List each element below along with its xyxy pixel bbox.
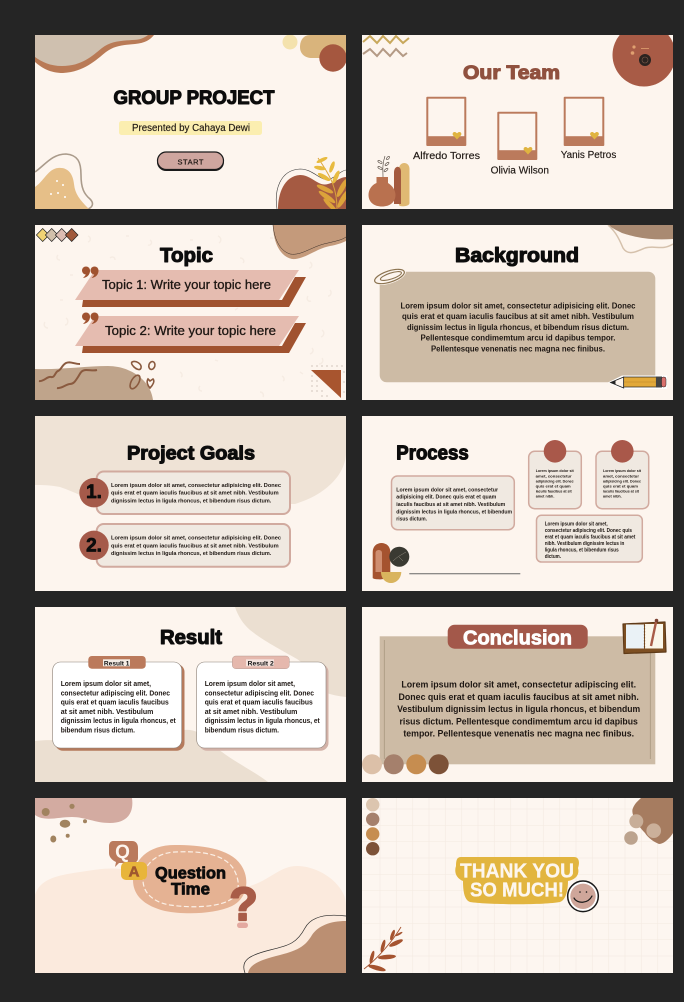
title: Project Goals: Project Goals [127,443,255,465]
name: Yanis Petros: Yanis Petros [561,150,616,161]
panel: Conclusion [362,607,673,782]
photo frame 2 [497,112,537,160]
text box: top right: amet, consectetur [603,473,639,478]
blob: top right [273,225,346,259]
photo frame 3 [564,97,604,146]
card: Result 2: bibendum risus dictum. [205,725,279,734]
goal 1 [79,472,290,514]
name: Olivia Wilson: Olivia Wilson [491,166,549,177]
heading pill: Conclusion: Conclusion [463,627,572,649]
text box: left: risus dictum. [396,517,427,523]
text box: left: Lorem ipsum dolor sit amet, consectetur [396,487,499,493]
text box: top middle: quis erat et quam [536,484,571,489]
goal 1: 1. [86,482,102,503]
card: Result 1: at sit amet nibh. Vestibulum [61,707,153,716]
title: Result: Result [160,627,222,649]
text box: bottom: consectetur adipiscing elit. Donec quis [545,528,632,534]
card: Result 1 [53,656,185,751]
card: Result 2: Result 2 [248,661,274,667]
text box: top right: iaculis faucibus at sit [603,489,640,494]
blob: lower background [35,866,346,973]
title: GROUP PROJECT: GROUP PROJECT [114,87,275,109]
triangle with dots [311,366,344,398]
card: Result 1: Result 1 [104,661,130,667]
text box: top right: quis erat et quam [603,484,638,489]
text card [380,636,655,764]
blob: bottom left with squiggles [35,361,156,400]
text box: top right: amet nibh. [603,494,622,499]
text card: dignissim lectus in ligula rhoncus, et bibendum risus dictum. [407,323,629,332]
icon: camera circle [612,35,673,86]
title: Topic: Topic [160,244,213,267]
icon: paperclip [374,268,406,285]
panel: Thank you [362,798,673,973]
text card: Pellentesque venenatis nec magna nec finibus. [431,345,605,354]
heading pill: Conclusion [448,625,588,649]
illustration: arches and plant circle [373,543,409,583]
sticker: thank you so much: THANK YOU [460,860,574,882]
zigzag decoration [363,36,409,56]
blob: top left [35,35,154,73]
text box: top middle: amet, consectetur [536,473,572,478]
text card: risus dictum. Pellentesque condimemtum arcu id dapibus [400,716,638,726]
goal 2 [79,524,290,567]
decor: diamonds [36,228,78,242]
photo frame 1 [426,97,466,146]
text box: top right [596,440,649,509]
sticker: thank you so much [455,857,579,904]
blob: top right [235,607,346,697]
card: Result 1: bibendum risus dictum. [61,725,135,734]
card: Result 1: quis erat et quam iaculis faucibus [61,698,169,707]
text box: top right: adipisicing elit. Donec [603,478,642,483]
panel: Background [362,225,673,400]
blob: question time badge [133,845,246,913]
icon: smiley [568,881,598,912]
blob: bottom left [35,154,92,209]
text card: Lorem ipsum dolor sit amet, consectetur adipisicing elit. Donec [400,301,636,310]
text card [380,272,655,382]
sticker: thank you so much: SO MUCH! [470,879,564,901]
button: START: START [178,158,204,166]
text box: bottom: erat et quam iaculis faucibus at sit amet [545,535,636,541]
blob: top right with circles [624,798,673,845]
text box: bottom [536,515,642,562]
blob: top background [35,416,346,504]
text box: top middle: adipisicing elit. Donec [536,478,574,483]
icon: A bubble: A [129,864,140,880]
icon: A bubble [121,862,147,880]
heading: Question Time [155,863,226,898]
swatches [362,754,449,774]
card: Result 1: dignissim lectus in ligula rhoncus, et [61,716,176,725]
icon: question mark: ? [229,878,258,930]
text card: Pellentesque condimemtum arcu id dapibus tempor. [420,334,616,343]
text box: bottom: Lorem ipsum dolor sit amet, [545,522,608,528]
text box: bottom: dictum. [545,554,561,560]
card: Result 1: consectetur adipiscing elit. Donec [61,688,170,697]
text box: top middle: iaculis faucibus at sit [536,489,572,494]
text card: tempor. Pellentesque venenatis nec magna nec finibus. [403,729,634,739]
panel: title slide [35,34,350,213]
button: START [157,152,224,171]
card: Result 2: Lorem ipsum dolor sit amet, [205,679,295,688]
panel: Topic [35,225,346,400]
ribbon: topic 1: Topic 1: Write your topic here [102,277,271,292]
card: Result 1: Lorem ipsum dolor sit amet, [61,679,151,688]
panel: Project Goals [35,416,346,591]
text box: left: adipisicing elit. Donec quis erat et quam [396,495,496,501]
icon: notebook and pen [623,619,666,654]
ribbon: topic 1 [75,266,306,307]
panel: Question Time [35,798,346,973]
decor: top right circles [282,34,347,72]
panel: Our Team [362,24,676,209]
title: Our Team: Our Team [463,63,560,84]
card: Result 2: dignissim lectus in ligula rhoncus, et [205,716,320,725]
text box: bottom: ligula rhoncus, et bibendum risus [545,547,619,553]
text box: top middle [529,440,581,509]
blob: bottom left [35,730,268,782]
goal 1: dignissim lectus in ligula rhoncus, et bibendum risus dictum. [111,498,272,504]
text card: Lorem ipsum dolor sit amet, consectetur adipiscing elit. [401,680,636,690]
text card: quis erat et quam iaculis faucibus at sit amet nibh. Vestibulum [402,312,634,321]
blob: bottom right with leaf [276,157,346,209]
goal 2: Lorem ipsum dolor sit amet, consectetur adipisicing elit. Donec [111,536,281,542]
swatches [366,798,379,855]
text box: top middle: amet nibh. [536,494,554,499]
icon: Q bubble [109,841,138,867]
blob: top left pink with dots [35,798,132,842]
title: Process: Process [396,443,469,465]
goal 2: 2. [86,535,102,556]
card: Result 2 [197,656,328,751]
card: Result 2: quis erat et quam iaculis faucibus [205,698,313,707]
goal 2: quis erat et quam iaculis faucibus at sit amet nibh. Vestibulum [111,543,279,549]
illustration: vase [368,156,410,206]
panel: Process [362,416,673,591]
text box: left: dignissim lectus in ligula rhoncus, et bibendum [396,509,512,515]
blob: top right [608,225,673,253]
text box: left: iaculis faucibus at sit amet nibh. Vestibulum [396,502,505,508]
icon: pencil [608,376,667,389]
icon: Q bubble: Q [115,842,130,863]
ribbon: topic 2: Topic 2: Write your topic here [105,323,276,338]
goal 1: quis erat et quam iaculis faucibus at sit amet nibh. Vestibulum [111,491,279,497]
goal 2: dignissim lectus in ligula rhoncus, et bibendum risus dictum. [111,551,272,557]
text card: Vestibulum dignissim lectus in ligula rhoncus, et bibendum [397,704,640,714]
subtitle pill: Presented by Cahaya Dewi [132,123,250,134]
goal 1: Lorem ipsum dolor sit amet, consectetur adipisicing elit. Donec [111,483,281,489]
illustration: leaf branch [364,927,404,973]
card: Result 2: at sit amet nibh. Vestibulum [205,707,297,716]
name: Alfredo Torres: Alfredo Torres [413,151,480,162]
text box: top right: Lorem ipsum dolor sit [603,468,642,473]
ribbon: topic 2 [75,312,306,353]
blob: bottom right [244,915,346,973]
card: Result 2: consectetur adipiscing elit. Donec [205,688,314,697]
text box: top middle: Lorem ipsum dolor sit [536,468,574,473]
heading: Question Time: Question [155,863,226,882]
heading: Question Time: Time [171,879,210,898]
text card: Donec quis erat et quam iaculis faucibus at sit amet nibh. [399,692,639,702]
text box: bottom: nibh. Vestibulum dignissim lectus in [545,541,624,547]
title: Background: Background [455,245,579,267]
text box: left [392,476,514,530]
subtitle pill [119,121,262,135]
panel: Result [35,607,346,782]
divider line [409,573,520,575]
